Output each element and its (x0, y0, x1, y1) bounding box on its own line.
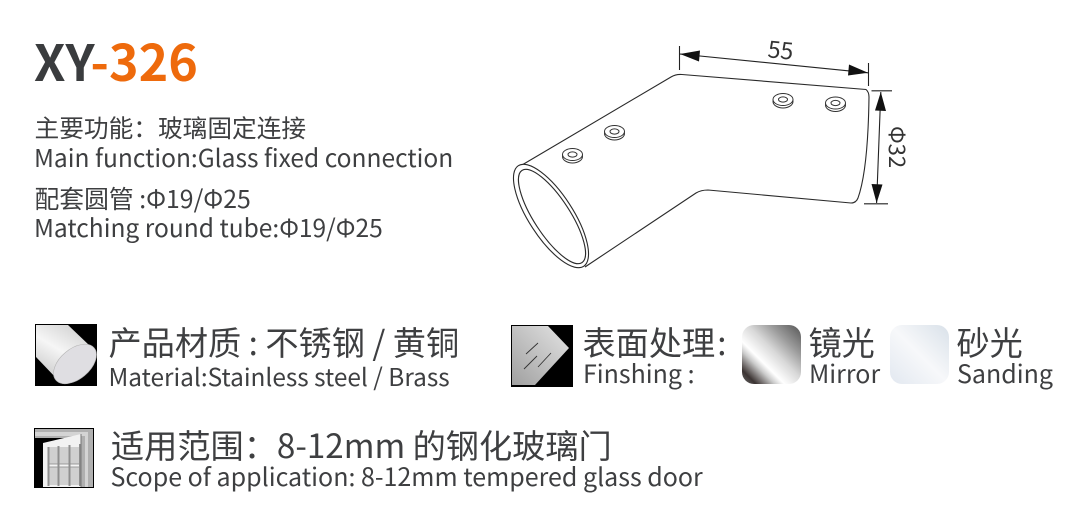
text: main function English: Main function:Glass fixed connection (34, 140, 453, 174)
bolt 2 (604, 126, 624, 140)
icon: door (34, 428, 94, 488)
label: sanding Chinese: 砂光 (956, 316, 1023, 365)
dimension: length 55 (680, 30, 868, 86)
heading: finishing Chinese: 表面处理: (582, 316, 726, 365)
dimension: diameter 32: Φ32 (882, 126, 914, 168)
tube connector outline (500, 74, 869, 278)
swatch: mirror (742, 325, 801, 384)
label: mirror English: Mirror (809, 355, 880, 391)
label: mirror Chinese: 镜光 (808, 316, 875, 365)
dimension: diameter 32 (864, 91, 914, 204)
text: material English: Material:Stainless steel / Brass (108, 358, 450, 394)
text: main function Chinese: 主要功能：玻璃固定连接 (34, 109, 306, 145)
text: matching tube Chinese: 配套圆管 :Φ19/Φ25 (34, 180, 251, 216)
dimension: length 55: 55 (766, 30, 795, 67)
bolt 3 (773, 94, 793, 108)
heading: material Chinese: 产品材质 : 不锈钢 / 黄铜 (108, 316, 459, 365)
heading: scope Chinese: 适用范围：8-12mm 的钢化玻璃门 (111, 418, 612, 468)
bolt 1 (562, 148, 582, 163)
icon: finishing glass (511, 325, 573, 387)
text: matching tube English: Matching round tube:Φ19/Φ25 (34, 210, 383, 244)
swatch: sanding (890, 325, 949, 384)
title: model number: XY-326 (34, 24, 198, 96)
icon: material tube (35, 324, 97, 386)
text: finishing English: Finshing : (583, 355, 695, 391)
label: sanding English: Sanding (957, 355, 1053, 391)
text: scope English: Scope of application: 8-12mm tempered glass door (110, 458, 703, 494)
bolt 4 (826, 97, 846, 112)
